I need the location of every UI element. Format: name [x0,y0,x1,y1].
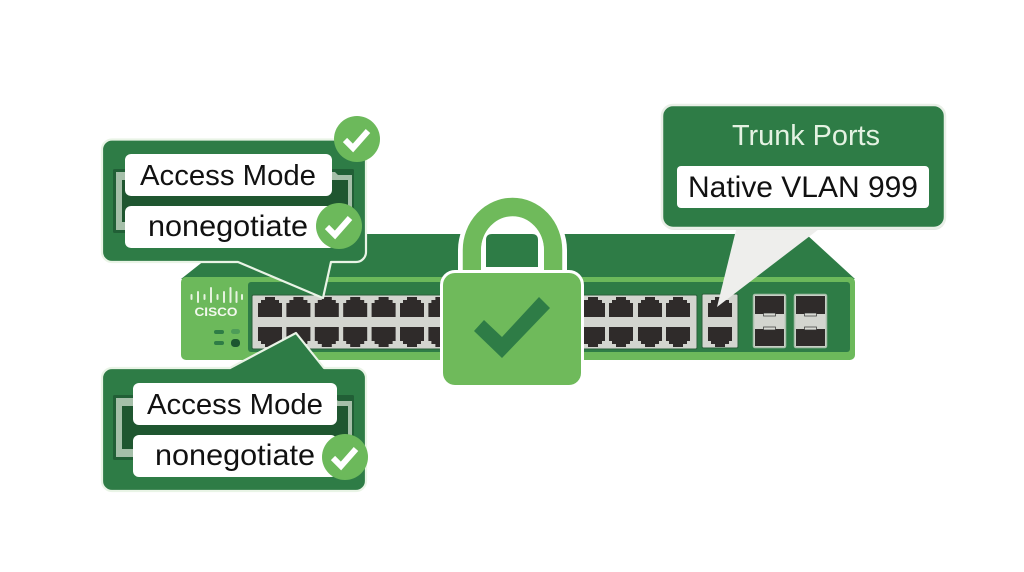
heading: trunk ports: Trunk Ports [732,120,880,152]
access port block [252,295,697,349]
icon: padlock with check [440,195,584,388]
icon: check badge top [334,116,380,162]
label: nonegotiate [125,206,335,248]
status LEDs [214,329,240,347]
trunk port block [702,294,738,348]
port illustration [113,395,354,460]
callout pointer [717,226,823,307]
network switch [181,234,855,360]
callout bubble [662,105,945,228]
dark port panel [248,282,850,352]
SFP port left [754,294,786,348]
switch visible through shackle [486,234,538,267]
label: nonegotiate [133,435,337,477]
label: access mode: Access Mode [147,389,323,421]
callout: upper access port [102,116,380,298]
label: access mode: Access Mode [140,160,316,192]
cisco logo [192,288,242,319]
callout: lower access port [102,333,368,491]
SFP port right [794,294,826,348]
padlock body halo [440,270,584,388]
padlock check mark [474,297,550,358]
switch top face [181,234,855,279]
padlock body [443,273,581,385]
label: nonegotiate: nonegotiate [155,439,315,472]
label: access mode [133,383,337,425]
callout bubble [102,140,366,298]
switch front body [181,277,855,360]
shackle opening [481,217,544,272]
label: native vlan: Native VLAN 999 [688,171,918,204]
icon: check badge nonegotiate [316,203,362,249]
icon: check badge [322,434,368,480]
padlock shackle [472,207,553,285]
port illustration [113,169,354,233]
padlock white halo [458,195,567,280]
label: access mode [125,154,332,196]
label: nonegotiate: nonegotiate [148,210,308,243]
callout shadow [662,107,946,230]
callout bubble [102,333,366,491]
cisco logo: CISCO [194,305,238,319]
callout: trunk ports [662,105,946,307]
